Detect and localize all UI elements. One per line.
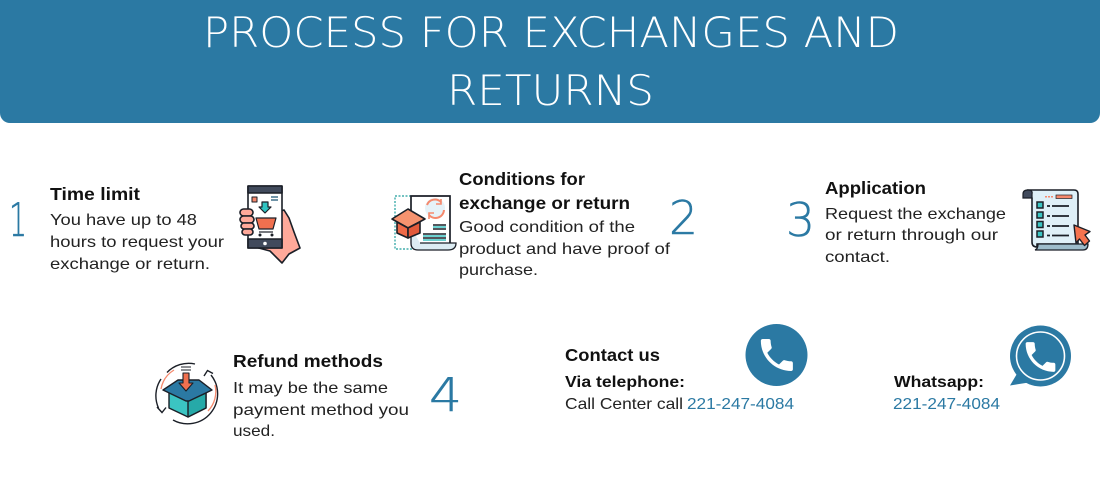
- panel: step 4 refund methods: [156, 351, 462, 440]
- step 4 text: [233, 380, 409, 440]
- panel: step 2 conditions: [392, 169, 698, 279]
- whatsapp label: Whatsapp:: [894, 374, 984, 391]
- step 2 heading: exchange or return: [459, 193, 630, 213]
- step 1 text: [50, 212, 225, 273]
- step 3 text: Request the exchange: [825, 206, 1006, 223]
- title: [203, 8, 899, 115]
- number 2: 2: [669, 191, 698, 245]
- icon: box and document: [392, 196, 456, 250]
- step 3 text: or return through our: [825, 227, 999, 244]
- step 1 text: hours to request your: [50, 234, 225, 251]
- number 1: 1: [9, 193, 27, 247]
- number 3: 3: [786, 193, 815, 247]
- call center line: 221-247-4084: [687, 396, 794, 413]
- contact heading: Contact us: [565, 345, 660, 365]
- step 3 text: contact.: [825, 249, 890, 266]
- icon: whatsapp bubble: [1010, 326, 1071, 386]
- header band: [0, 0, 1100, 123]
- icon: hand holding phone with cart: [240, 186, 300, 263]
- step 1 heading: Time limit: [50, 184, 140, 204]
- panel: contact us: [565, 324, 808, 413]
- panel: whatsapp: [893, 326, 1071, 413]
- step 2 text: Good condition of the: [459, 219, 635, 236]
- step 4 text: used.: [233, 423, 275, 440]
- step 2 heading: Conditions for: [459, 169, 585, 189]
- step 2 heading: [459, 169, 630, 213]
- title: PROCESS FOR EXCHANGES AND: [203, 8, 899, 57]
- step 1 text: exchange or return.: [50, 256, 210, 273]
- panel: step 3 application: [786, 178, 1090, 266]
- icon: box with circular arrows: [156, 363, 218, 424]
- whatsapp number: 221-247-4084: [893, 396, 1000, 413]
- title: RETURNS: [447, 66, 654, 115]
- call center line: [565, 396, 794, 413]
- step 2 text: purchase.: [459, 262, 538, 279]
- step 3 heading: Application: [825, 178, 926, 198]
- telephone label: Via telephone:: [565, 374, 685, 391]
- icon: checklist with cursor: [1023, 190, 1090, 250]
- panel: step 1 time limit: [9, 184, 300, 273]
- call center line: Call Center call: [565, 396, 683, 413]
- step 4 text: It may be the same: [233, 380, 388, 397]
- icon: telephone: [746, 324, 808, 386]
- step 2 text: [459, 219, 671, 279]
- step 4 text: payment method you: [233, 402, 409, 419]
- step 1 text: You have up to 48: [50, 212, 197, 229]
- step 4 heading: Refund methods: [233, 351, 383, 371]
- number 4: 4: [429, 368, 462, 422]
- step 2 text: product and have proof of: [459, 241, 671, 258]
- step 3 text: [825, 206, 1006, 266]
